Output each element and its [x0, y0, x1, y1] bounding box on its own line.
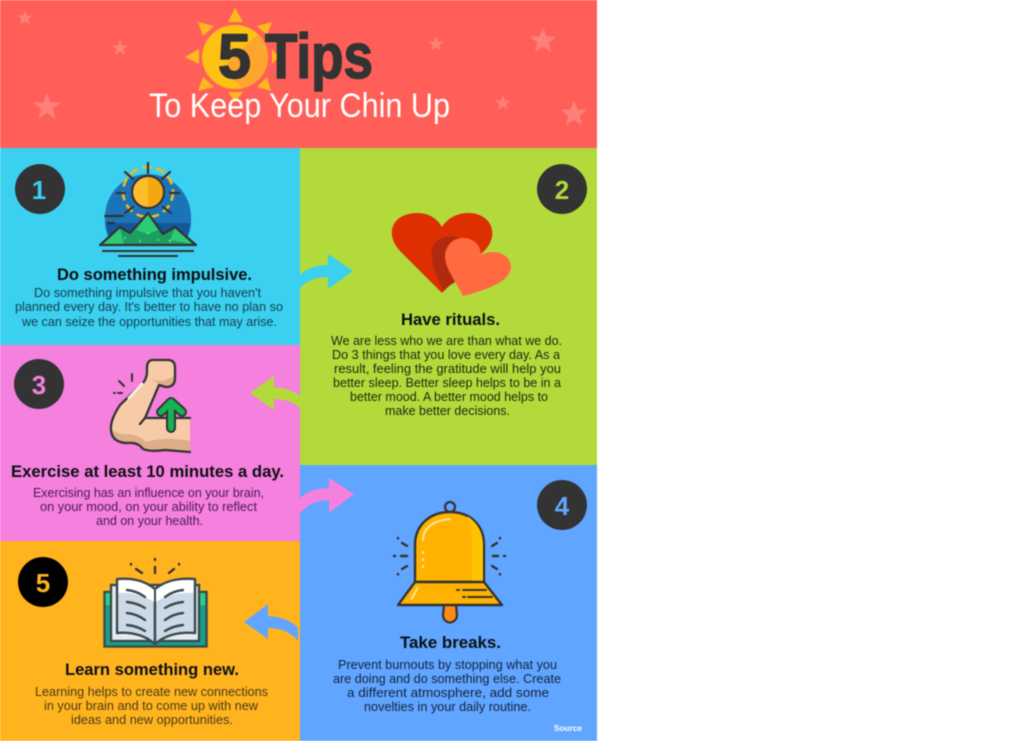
heading: Learn something new.	[65, 660, 239, 679]
badge 3	[14, 359, 64, 409]
badge 1	[15, 164, 65, 214]
text block: Learning helps to create new connections	[35, 684, 268, 699]
icon: hearts	[392, 213, 511, 296]
badge 1: 1	[32, 175, 46, 205]
text block: better mood. A better mood helps to	[350, 389, 548, 404]
text block: a different atmosphere, add some	[347, 685, 549, 700]
text block: better sleep. Better sleep helps to be in a	[333, 375, 562, 390]
text block: we can seize the opportunities that may arise.	[21, 314, 277, 329]
text block: We are less who we are than what we do.	[331, 333, 562, 348]
arrow: 1 to 2	[300, 254, 353, 289]
subtitle: To Keep Your Chin Up	[149, 87, 450, 125]
text block: are doing and do something else. Create	[333, 671, 561, 686]
text block: on your mood, on your ability to reflect	[40, 499, 257, 514]
badge 2	[537, 164, 587, 214]
title number: 5	[218, 22, 251, 92]
heading: Exercise at least 10 minutes a day.	[11, 462, 284, 481]
text block: and on your health.	[96, 513, 203, 528]
text block: Exercising has an influence on your brain,	[33, 485, 264, 500]
badge 3: 3	[32, 370, 46, 400]
panel: tip 5	[0, 541, 300, 741]
text block: Do something impulsive that you haven't	[34, 285, 261, 300]
arrow: 4 to 5	[244, 604, 298, 641]
heading: Take breaks.	[400, 633, 501, 652]
panel: tip 2	[300, 148, 597, 465]
icon: flexed arm	[111, 360, 190, 452]
panel: tip 1	[0, 148, 300, 345]
text block: Prevent burnouts by stopping what you	[338, 657, 557, 672]
text block: planned every day. It's better to have no plan so	[15, 299, 283, 314]
text block: ideas and new opportunities.	[71, 712, 233, 727]
text block	[333, 657, 561, 714]
badge 4	[537, 480, 587, 530]
text block: Do 3 things that you love every day. As a	[332, 347, 561, 362]
arrow: 2 to 3	[250, 376, 300, 410]
text block	[35, 684, 268, 727]
text block: make better decisions.	[385, 403, 510, 418]
text block	[331, 333, 562, 418]
heading: Do something impulsive.	[57, 265, 252, 284]
text block	[33, 485, 264, 528]
badge 5	[18, 557, 68, 607]
text block	[15, 285, 283, 329]
text block: novelties in your daily routine.	[364, 699, 531, 714]
title: Tips	[265, 22, 373, 92]
badge 4: 4	[555, 491, 570, 521]
panel: tip 4	[300, 465, 597, 741]
panel: header	[0, 0, 597, 148]
heading: Have rituals.	[401, 310, 500, 329]
text block: result, feeling the gratitude will help you	[334, 361, 561, 376]
badge 5: 5	[36, 568, 50, 598]
icon: sun	[185, 8, 279, 102]
text block: in your brain and to come up with new	[44, 698, 259, 713]
panel: tip 3	[0, 345, 300, 541]
badge 2: 2	[555, 175, 569, 205]
icon: mountain sunrise	[100, 163, 196, 256]
arrow: 3 to 4	[300, 478, 354, 514]
source: Source	[554, 724, 583, 733]
icon: bell	[394, 502, 505, 623]
icon: open book	[104, 559, 206, 646]
